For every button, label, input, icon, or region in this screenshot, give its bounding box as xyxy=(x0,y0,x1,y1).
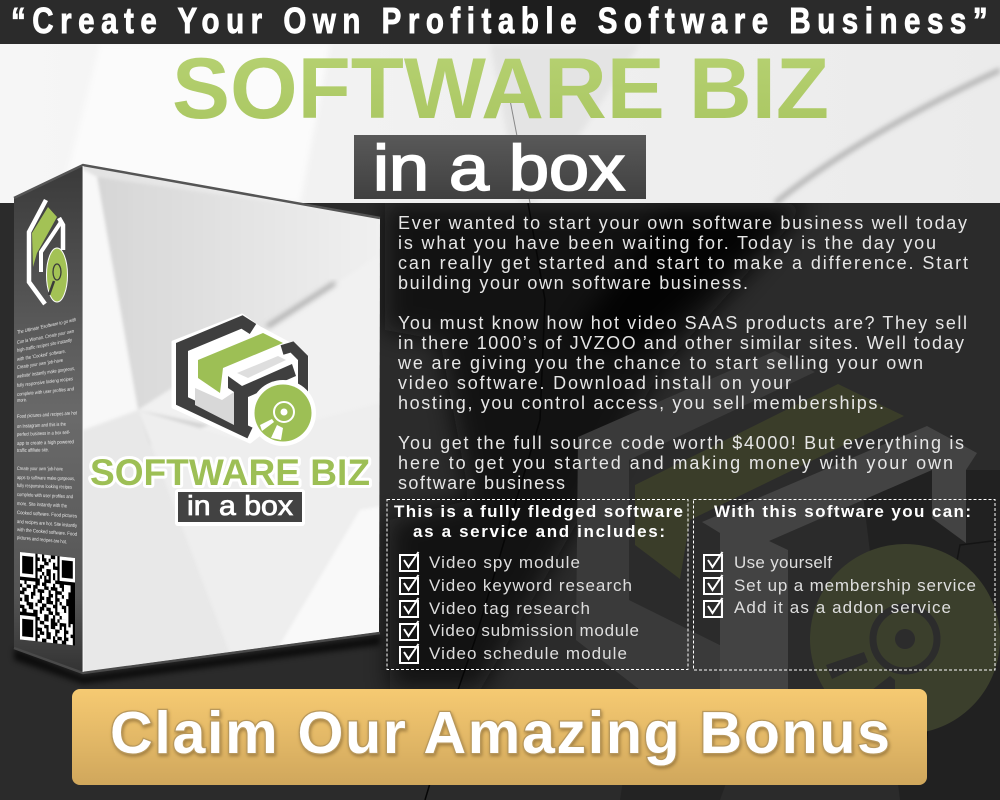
heading: you can: With this software you can: xyxy=(714,502,971,521)
box bottom edge xyxy=(14,633,380,673)
box top edge xyxy=(14,165,380,218)
paragraph 3 xyxy=(398,433,964,493)
item: video submission module: Video submission module xyxy=(429,621,639,640)
panel: software includes xyxy=(387,500,688,670)
paragraph 2: we are giving you the chance to start selling your own xyxy=(397,353,923,373)
button label: Claim Our Amazing Bonus xyxy=(110,700,890,766)
item: video spy module: Video spy module xyxy=(429,553,580,572)
box logo tag xyxy=(175,489,305,526)
item: video tag research: Video tag research xyxy=(429,599,590,618)
top banner xyxy=(0,0,1000,44)
box vertical highlight xyxy=(82,166,84,672)
paragraph 2: hosting, you control access, you sell memberships. xyxy=(398,393,884,413)
paragraph 2: video software. Download install on your xyxy=(398,373,791,393)
spine text: website' instantly make gorgeous, xyxy=(17,366,75,380)
spine text: Con la Woman. Create your own xyxy=(17,329,74,346)
spine text: Create your own 'job-have xyxy=(17,358,63,371)
spine qr code xyxy=(20,552,75,646)
spine text: complete with user profiles and xyxy=(17,386,74,398)
spine text: more. Site instantly with the xyxy=(17,501,67,510)
intro copy xyxy=(397,213,968,493)
spine icon xyxy=(29,200,68,304)
paragraph 1: Ever wanted to start your own software business well today xyxy=(398,213,967,233)
spine text: Create your own 'job-have xyxy=(17,466,63,472)
spine text: perfect business in a box self- xyxy=(17,430,70,438)
spine text: fully responsive looking recipes xyxy=(17,483,72,491)
paragraph 1 xyxy=(398,213,968,293)
spine text: complete with user profiles and xyxy=(17,492,73,500)
panel: what you can do xyxy=(694,500,995,670)
spine text: with the Cooked software. Food xyxy=(17,527,77,538)
background: dark lower area xyxy=(378,203,1000,800)
icon: disc xyxy=(250,380,316,446)
spine text: with the 'Cooked' software. xyxy=(17,349,66,363)
item: set up a membership service: Set up a membership service xyxy=(734,576,976,595)
item: add it as a addon service: Add it as a addon service xyxy=(734,598,951,617)
heading: includes: This is a fully fledged software xyxy=(394,502,683,521)
paragraph 3: here to get you started and making money with your own xyxy=(398,453,953,473)
item: video keyword research: Video keyword research xyxy=(429,576,632,595)
box front face xyxy=(75,165,390,680)
spine text: more. xyxy=(17,397,27,404)
banner headline: “Create Your Own Profitable Software Business” xyxy=(11,0,988,41)
spine text: Food pictures and recipes are hot xyxy=(17,410,77,420)
spine text: pictures and recipes are hot. xyxy=(17,535,67,545)
paragraph 2 xyxy=(397,313,967,413)
heading: includes: as a service and includes: xyxy=(413,522,665,541)
logo tag: in a box: in a box xyxy=(373,132,625,204)
product box xyxy=(14,165,390,684)
spine text: app to create a high powered xyxy=(17,439,74,447)
spine text: fully responsive looking recipes xyxy=(17,376,73,389)
call to action button xyxy=(72,689,927,785)
spine text: high-traffic recipes site instantly xyxy=(17,338,72,354)
spine text: and recipes are hot. Site instantly xyxy=(17,519,77,529)
paragraph 1: is what you have been waiting for. Today is the day you xyxy=(398,233,936,253)
box shadow xyxy=(14,636,380,684)
box logo wordmark: SOFTWARE BIZ xyxy=(90,452,370,493)
heading: includes xyxy=(394,502,683,541)
icon: package with disc xyxy=(173,315,316,446)
box logo tag: in a box xyxy=(187,490,293,521)
paragraph 2: in there 1000’s of JVZOO and other similar sites. Well today xyxy=(398,333,964,353)
spine text: traffic affiliate site. xyxy=(17,447,49,454)
background: ghosted package logo xyxy=(576,351,1000,734)
logo wordmark: software biz: SOFTWARE BIZ xyxy=(172,41,829,137)
spine text: The Ultimate 'Esoftware to go with xyxy=(17,317,76,336)
spine text xyxy=(17,317,77,545)
background: light header band xyxy=(0,44,1000,203)
spine text: apps to software make gorgeous, xyxy=(17,475,75,482)
item: use yourself: Use yourself xyxy=(734,553,832,572)
box spine xyxy=(14,165,83,672)
paragraph 3: You get the full source code worth $4000! But everything is xyxy=(398,433,964,453)
paragraph 1: can really get started and start to make a difference. Start xyxy=(398,253,968,273)
item: video schedule module: Video schedule module xyxy=(429,644,627,663)
paragraph 1: building your own software business. xyxy=(398,273,748,293)
paragraph 2: You must know how hot video SAAS products are? They sell xyxy=(398,313,967,333)
spine text: Cooked software. Food pictures xyxy=(17,510,77,520)
paragraph 3: software business xyxy=(398,473,565,493)
main logo xyxy=(172,41,829,204)
spine text: on Instagram and this is the xyxy=(17,422,66,430)
